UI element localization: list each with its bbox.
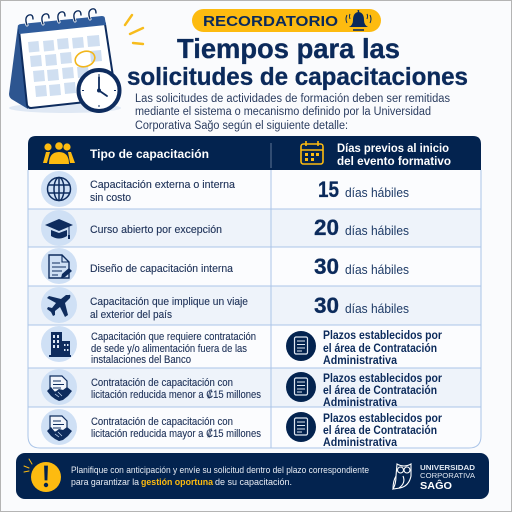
row 1: externa o interna: días hábiles [345,185,409,200]
row 5: sede: instalaciones del Banco [91,354,191,366]
banner text: de su capacitación. [215,477,292,488]
row 7: licitación mayor: Administrativa [323,437,398,449]
row 7: licitación mayor: licitación reducida mayor a ₡15 millones [91,428,261,440]
logo: Universidad Corporativa Sago: CORPORATIVA [420,471,475,480]
icon: document circle [286,412,316,442]
row 1: externa o interna [41,171,409,207]
row 2: curso abierto: días hábiles [345,223,409,238]
table header [28,136,481,170]
row 1: externa o interna: sin costo [90,192,131,204]
row 3: diseño [41,248,409,284]
banner text [71,465,369,488]
icon: graduation cap [41,210,77,246]
row 6: licitación menor: licitación reducida menor a ₡15 millones [91,389,261,401]
icon: globe [41,171,77,207]
footer banner [16,453,489,499]
row 6: licitación menor: Administrativa [323,397,398,409]
icon: document circle [286,372,316,402]
row 5: sede: el área de Contratación [323,343,437,355]
row 3: diseño: 30 [314,254,339,279]
row 2: curso abierto: Curso abierto por excepción [90,224,222,236]
row 6: licitación menor: Plazos establecidos por [323,373,442,385]
banner text: para garantizar la [71,477,140,488]
row 4: viaje: 30 [314,293,339,318]
title: Tiempos para las [177,33,400,64]
row 1: externa o interna: Capacitación externa o interna [90,179,236,191]
title [127,33,468,91]
row 6: licitación menor: el área de Contratación [323,385,437,397]
logo: Universidad Corporativa Sago: SAĜO [420,479,452,492]
icon: document with pencil [41,248,77,284]
icon: document circle [286,331,316,361]
badge: recordatorio: RECORDATORIO [203,14,338,30]
icon: bell [346,10,371,30]
intro text: mediante el sistema o mecanismo definido por la Universidad [135,106,431,118]
row 3: diseño: días hábiles [345,262,409,277]
icon: warning [24,459,61,492]
row 4: viaje: Capacitación que implique un viaje [90,296,248,308]
row 4: viaje: días hábiles [345,301,409,316]
icon: calendar with clock [9,9,121,113]
row 5: sede [41,326,442,367]
row 5: sede: Capacitación que requiere contratación [91,331,256,343]
row 4: viaje: al exterior del país [90,309,172,321]
icon: buildings [41,326,77,362]
row 7: licitación mayor: Plazos establecidos por [323,413,442,425]
row 2: curso abierto: 20 [314,215,339,240]
icon: people [43,142,75,164]
icon: handshake document [41,369,77,405]
row 5: sede: de sede y/o alimentación fuera de las [91,343,247,355]
badge: recordatorio [192,9,381,32]
alternating rows [28,209,481,407]
banner text: gestión oportuna [141,477,214,488]
table [28,136,481,449]
row 4: viaje [41,287,409,323]
table header: Días previos al inicio [337,143,449,155]
row 6: licitación menor: Contratación de capacitación con [91,377,233,389]
table header: del evento formativo [337,156,451,168]
logo: Universidad Corporativa Sago [393,463,476,492]
icon: calendar [301,141,323,164]
row 2: curso abierto [41,210,409,246]
row 7: licitación mayor: el área de Contratación [323,425,437,437]
row 3: diseño: Diseño de capacitación interna [90,263,234,275]
intro text: Corporativa Sağo según el siguiente detalle: [135,120,348,132]
row 1: externa o interna: 15 [318,177,339,202]
title: solicitudes de capacitaciones [127,63,468,91]
logo: Universidad Corporativa Sago: UNIVERSIDAD [420,463,476,472]
table header: Tipo de capacitación [90,149,209,161]
icon: airplane [41,287,77,323]
row 6: licitación menor [41,369,442,409]
row 7: licitación mayor [41,409,442,449]
row 5: sede: Plazos establecidos por [323,330,442,342]
intro text: Las solicitudes de actividades de formación deben ser remitidas [135,93,450,105]
banner text: Planifique con anticipación y envíe su solicitud dentro del plazo correspondiente [71,465,369,476]
row 5: sede: Administrativa [323,355,398,367]
icon: handshake document [41,409,77,445]
intro text [135,93,450,132]
icon: yellow rays [125,15,143,44]
row 7: licitación mayor: Contratación de capacitación con [91,416,233,428]
